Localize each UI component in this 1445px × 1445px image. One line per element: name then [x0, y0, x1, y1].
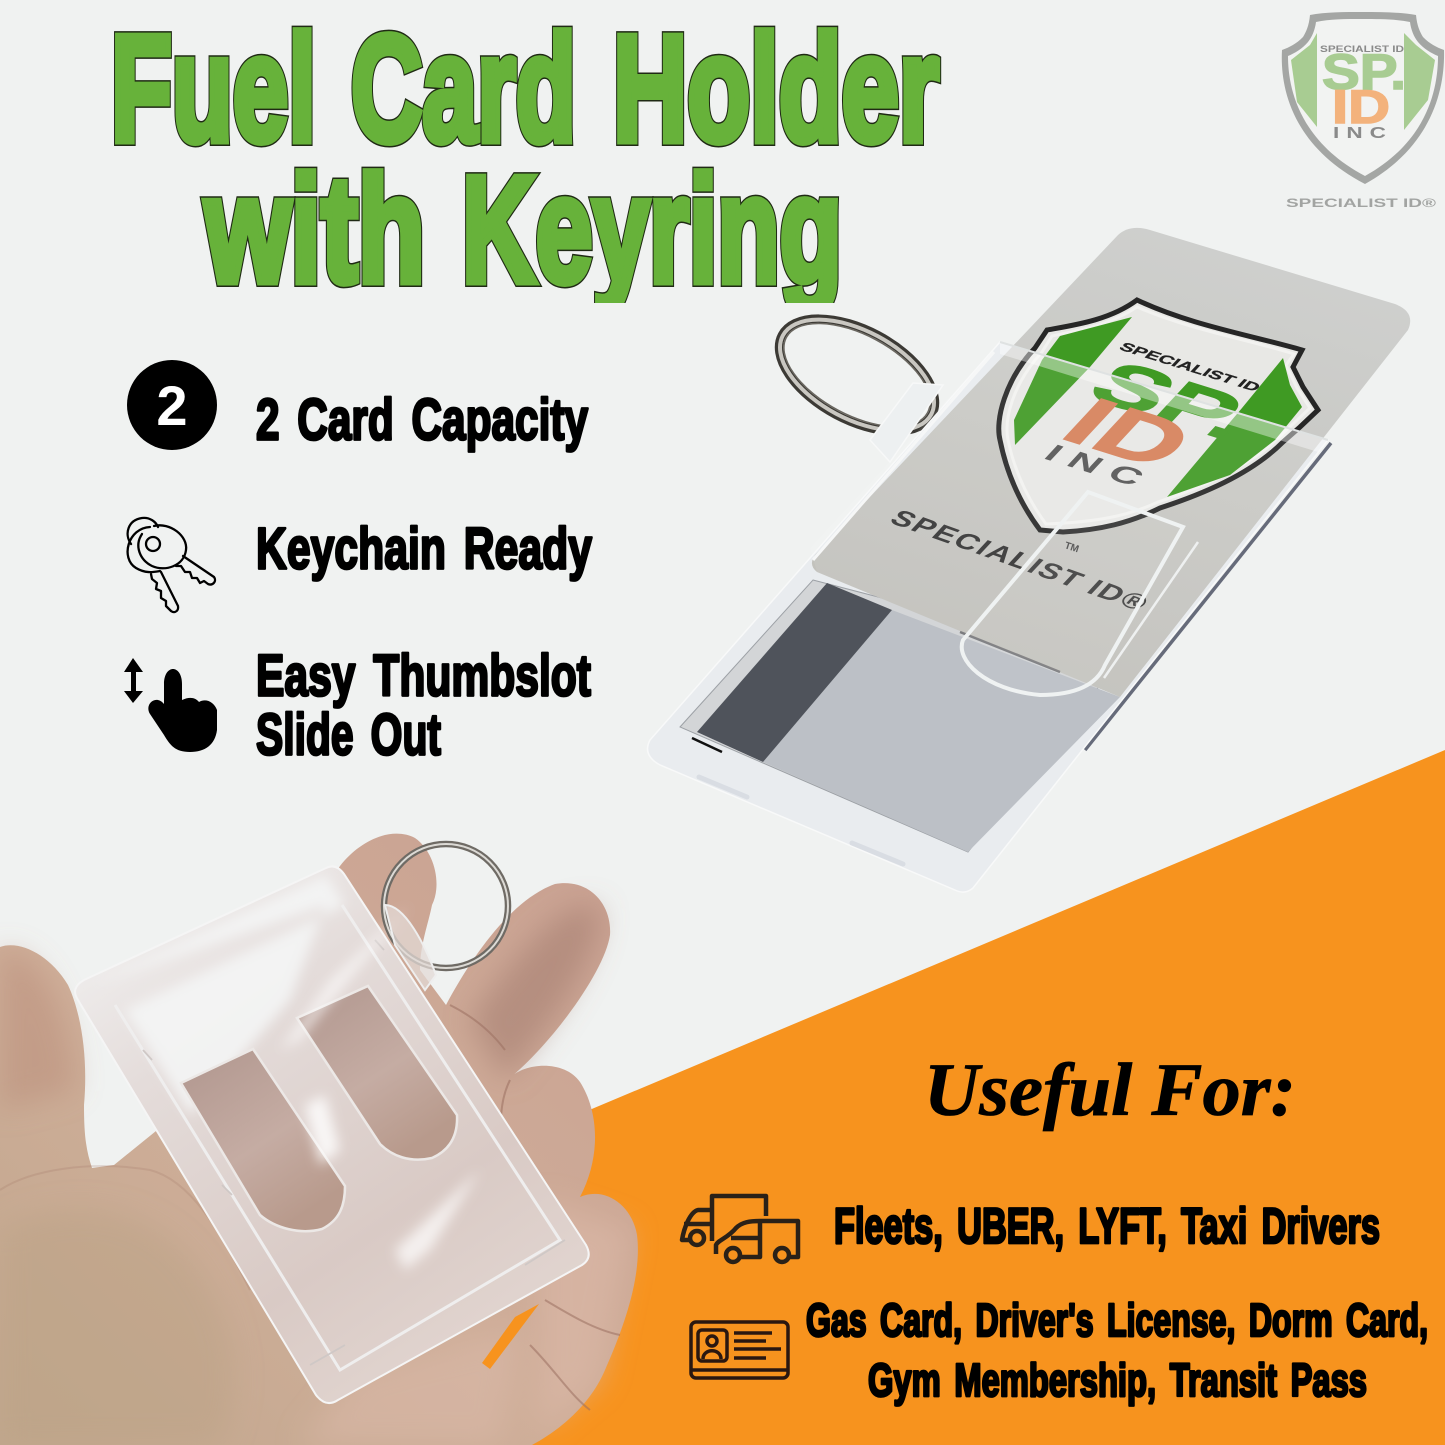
card shield logo: INC	[1038, 440, 1162, 494]
title: with	[204, 144, 425, 314]
title: Keyring	[462, 144, 842, 314]
title	[114, 26, 942, 303]
thumb slot right	[297, 986, 457, 1160]
keyring	[384, 844, 508, 968]
title: Card	[351, 4, 576, 172]
holder corner notches	[143, 940, 565, 1365]
title: Holder	[613, 4, 939, 172]
row: fleets	[682, 1196, 1380, 1262]
logo: Specialist ID shield: INC	[1333, 125, 1393, 142]
card wordmark: TM	[1063, 540, 1080, 555]
clear holder	[75, 866, 589, 1403]
card shield logo	[999, 300, 1318, 532]
finger creases	[0, 1005, 620, 1410]
photo: holder with card and keyring	[648, 228, 1410, 892]
row: cards	[691, 1294, 1428, 1406]
thumb slot left	[181, 1049, 345, 1231]
icon: number 2 badge: 2	[156, 374, 188, 437]
card shield logo: ID	[1045, 384, 1211, 482]
title: with	[204, 144, 425, 314]
keyring	[761, 295, 953, 455]
hand silhouette	[0, 834, 638, 1445]
label: 2 Card Capacity: 2 Card Capacity	[256, 388, 588, 452]
card lower edge shadow	[960, 632, 1060, 672]
logo: Specialist ID shield	[1282, 12, 1444, 210]
logo: Specialist ID shield: ID	[1332, 80, 1390, 133]
palm shading	[0, 906, 630, 1445]
inner rim of holder	[115, 905, 560, 1370]
text: card types	[806, 1294, 1428, 1406]
card shield logo: SP.	[1073, 349, 1273, 453]
label: Easy Thumbslot Slide Out: Easy Thumbslot	[256, 644, 591, 708]
label: Keychain Ready: Keychain Ready	[256, 516, 592, 582]
icon: ID card	[691, 1322, 788, 1378]
holder bottom notches	[699, 777, 903, 864]
inner window	[680, 580, 1120, 852]
title: Fuel	[111, 4, 316, 172]
orange panel	[0, 750, 1445, 1445]
shield green right	[1167, 358, 1302, 497]
card shield logo: SPECIALIST ID	[1116, 339, 1264, 394]
icon: number 2 badge	[127, 360, 217, 450]
light reflections	[280, 905, 480, 1270]
icon: keys	[128, 518, 215, 612]
clear holder top-left bright band	[90, 875, 345, 1115]
magnetic stripe	[697, 583, 892, 762]
photo: hand holding clear holder	[0, 834, 638, 1445]
title: Keyring	[462, 144, 842, 314]
feature: easy thumbslot slide out	[124, 644, 591, 768]
icon: trucks	[682, 1196, 798, 1262]
holder left rim inner edge	[813, 352, 994, 560]
title: Holder	[613, 4, 939, 172]
holder thumb slot	[962, 492, 1183, 695]
card wordmark: SPECIALIST ID®	[884, 504, 1157, 616]
shield green left	[1014, 317, 1132, 445]
clear holder body	[648, 342, 1328, 892]
label: Easy Thumbslot Slide Out: Slide Out	[256, 702, 441, 768]
title: Card	[351, 4, 576, 172]
title: Fuel	[111, 4, 316, 172]
label: Easy Thumbslot Slide Out	[256, 644, 591, 768]
orange gap between fingers	[482, 1304, 539, 1369]
logo: Specialist ID shield: SP.	[1322, 44, 1406, 100]
back card	[763, 610, 1120, 852]
feature: 2 card capacity	[127, 360, 588, 452]
heading: Useful For: Useful For:	[924, 1049, 1296, 1132]
feature: keychain ready	[128, 516, 592, 612]
dark back edge of card	[1085, 443, 1331, 750]
holder top band	[1000, 342, 1328, 452]
logo: Specialist ID shield: SPECIALIST ID	[1320, 44, 1404, 55]
holder wash overlay	[810, 342, 1328, 697]
holder tab	[870, 383, 943, 462]
specialist ID card	[812, 228, 1410, 697]
holder tab	[385, 905, 436, 990]
logo: Specialist ID shield: SPECIALIST ID®	[1286, 196, 1436, 210]
icon: hand with up-down arrow	[124, 658, 217, 752]
